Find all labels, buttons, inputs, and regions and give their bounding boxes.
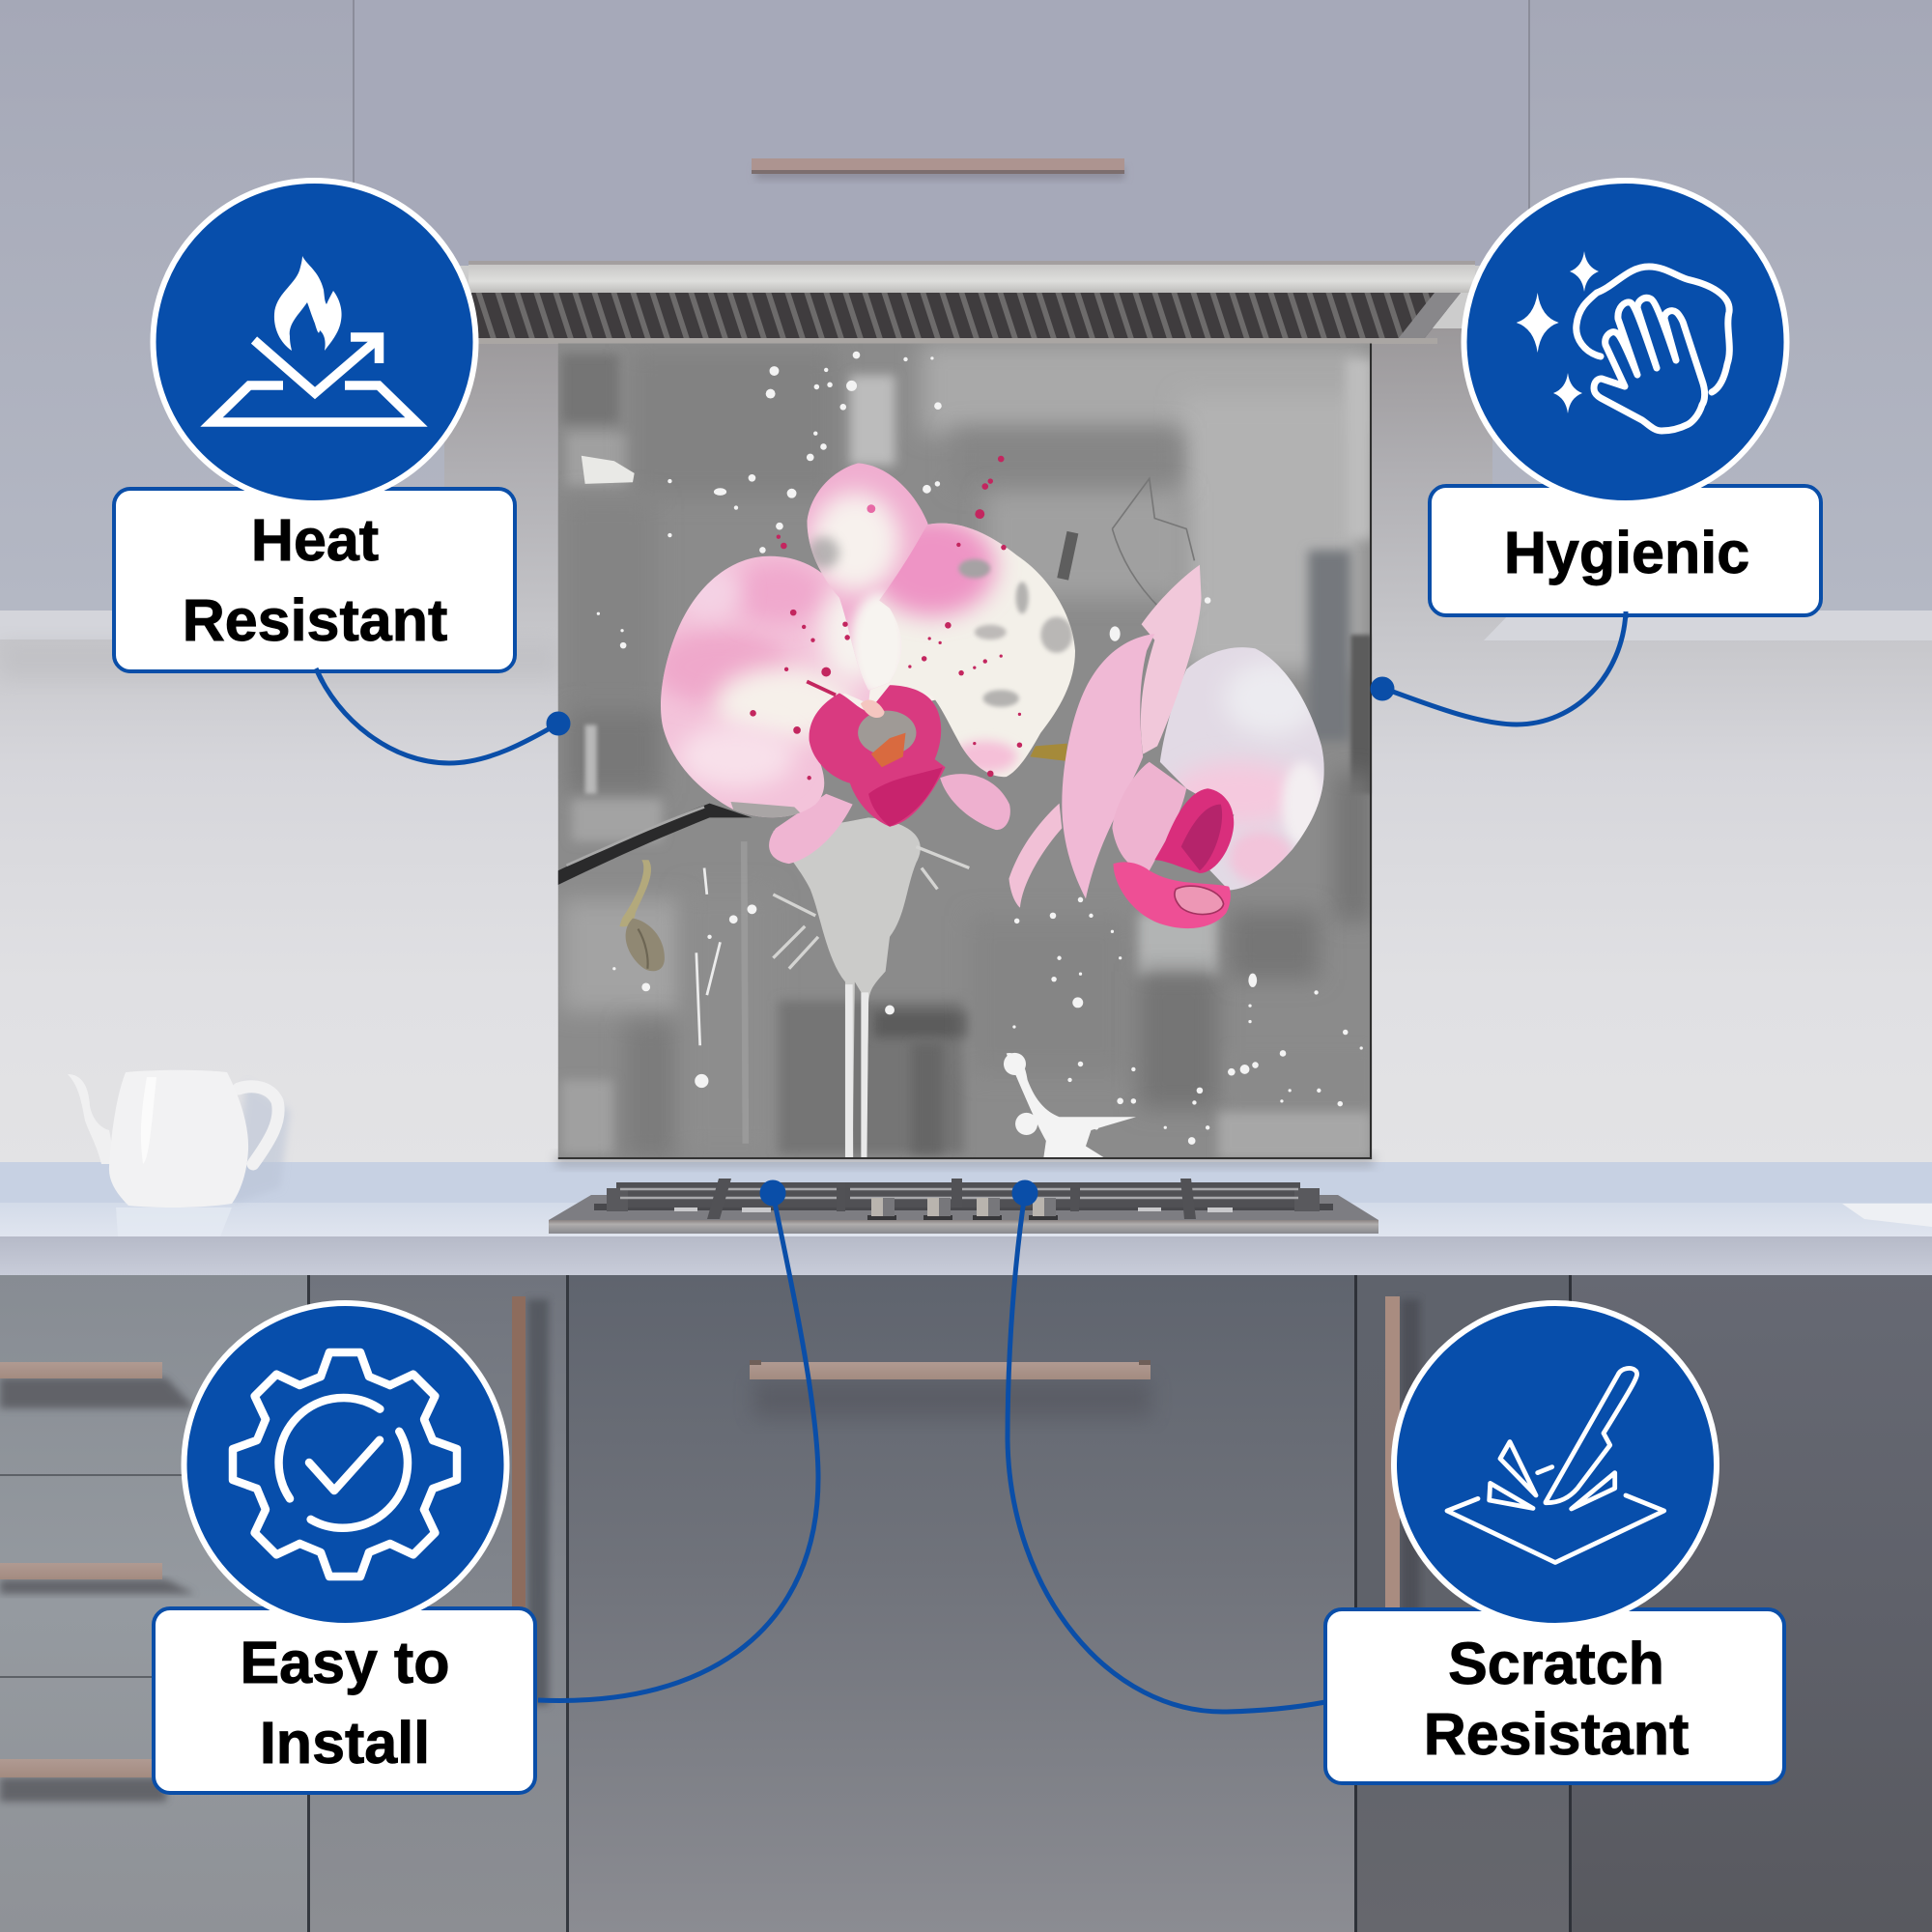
- white splash: [1007, 1053, 1136, 1159]
- connector: scratch resistant: [1008, 1182, 1325, 1712]
- small orchid flower: [1009, 565, 1335, 928]
- cabinet handles: [0, 1296, 1420, 1802]
- control knobs: [867, 1198, 1058, 1220]
- connector: hygienic: [1373, 611, 1626, 724]
- panel drop shadow: [555, 1154, 1374, 1167]
- callout: easy to install: [154, 1303, 535, 1793]
- back petal: [1159, 647, 1324, 891]
- icon: gear with check: [233, 1352, 457, 1577]
- wall shadow: [0, 641, 560, 680]
- lip throat: [858, 700, 943, 827]
- label text: Scratch: [1448, 1631, 1664, 1696]
- label box: [1325, 1609, 1784, 1783]
- cabinet seam left: [353, 0, 355, 266]
- column: [1112, 762, 1186, 871]
- left petal: [661, 556, 870, 817]
- lip bulb: [1154, 788, 1234, 873]
- label text: Resistant: [183, 587, 447, 653]
- label text: Hygienic: [1504, 520, 1749, 585]
- flower centre: [842, 676, 935, 711]
- range hood: [469, 261, 1475, 344]
- painted grey background: [558, 343, 1372, 1159]
- lip: [810, 685, 946, 827]
- connector: heat resistant: [316, 668, 568, 763]
- label box: [114, 489, 515, 671]
- countertop: [0, 1203, 1932, 1237]
- upper right cabinet trim: [1484, 611, 1932, 640]
- connector start: [316, 668, 323, 682]
- icon: knife scratching surface: [1447, 1368, 1664, 1563]
- connector start: [1623, 611, 1629, 618]
- connector: easy to install: [538, 1182, 818, 1701]
- burners: [674, 1206, 1233, 1212]
- icon: flame over surface: [212, 256, 416, 422]
- left petal: [1062, 634, 1154, 898]
- callout: scratch resistant: [1325, 1303, 1784, 1783]
- label box: [154, 1608, 535, 1793]
- stem: [558, 744, 1067, 885]
- top sepal: [1141, 565, 1202, 754]
- teapot: [68, 1070, 290, 1236]
- paint splatter: [597, 352, 1363, 1145]
- icon circle: [153, 181, 475, 503]
- cabinet seam right: [1528, 0, 1530, 266]
- right petal: [879, 524, 1075, 777]
- cooktop: [549, 1179, 1378, 1234]
- lower sepals: [769, 794, 853, 864]
- label box: [1430, 486, 1821, 615]
- sink edge: [1842, 1204, 1932, 1227]
- top sepal: [808, 464, 927, 690]
- orchid splashback panel: [555, 343, 1374, 1167]
- icon circle: [1464, 181, 1787, 503]
- callout: heat resistant: [114, 181, 515, 682]
- countertop back band: [0, 1162, 1932, 1205]
- label text: Heat: [251, 507, 379, 573]
- upper left cabinet: [0, 0, 444, 611]
- upper handle: [752, 158, 1124, 180]
- side wing: [1009, 804, 1062, 908]
- upper left cabinet trim: [0, 611, 464, 639]
- orchid bud: [619, 860, 665, 971]
- lower cabinets: [0, 1275, 1932, 1932]
- lower lip: [1114, 862, 1231, 928]
- upper centre cabinet: [354, 0, 1529, 266]
- magenta speckles: [750, 456, 1022, 780]
- icon circle: [184, 1303, 506, 1626]
- upper right cabinet: [1492, 0, 1932, 611]
- white paint drip: [696, 817, 969, 1159]
- label text: Easy to: [240, 1630, 450, 1695]
- panel edge: [1370, 343, 1372, 1159]
- grates: [607, 1179, 1320, 1219]
- icon circle: [1394, 1303, 1717, 1626]
- icon: hand wiping with sparkles: [1517, 251, 1729, 431]
- backsplash wall: [0, 328, 1932, 1169]
- label text: Install: [260, 1710, 430, 1776]
- callout: hygienic: [1430, 181, 1821, 618]
- large orchid flower: [651, 455, 1080, 864]
- countertop edge: [0, 1236, 1932, 1275]
- label text: Resistant: [1424, 1701, 1689, 1767]
